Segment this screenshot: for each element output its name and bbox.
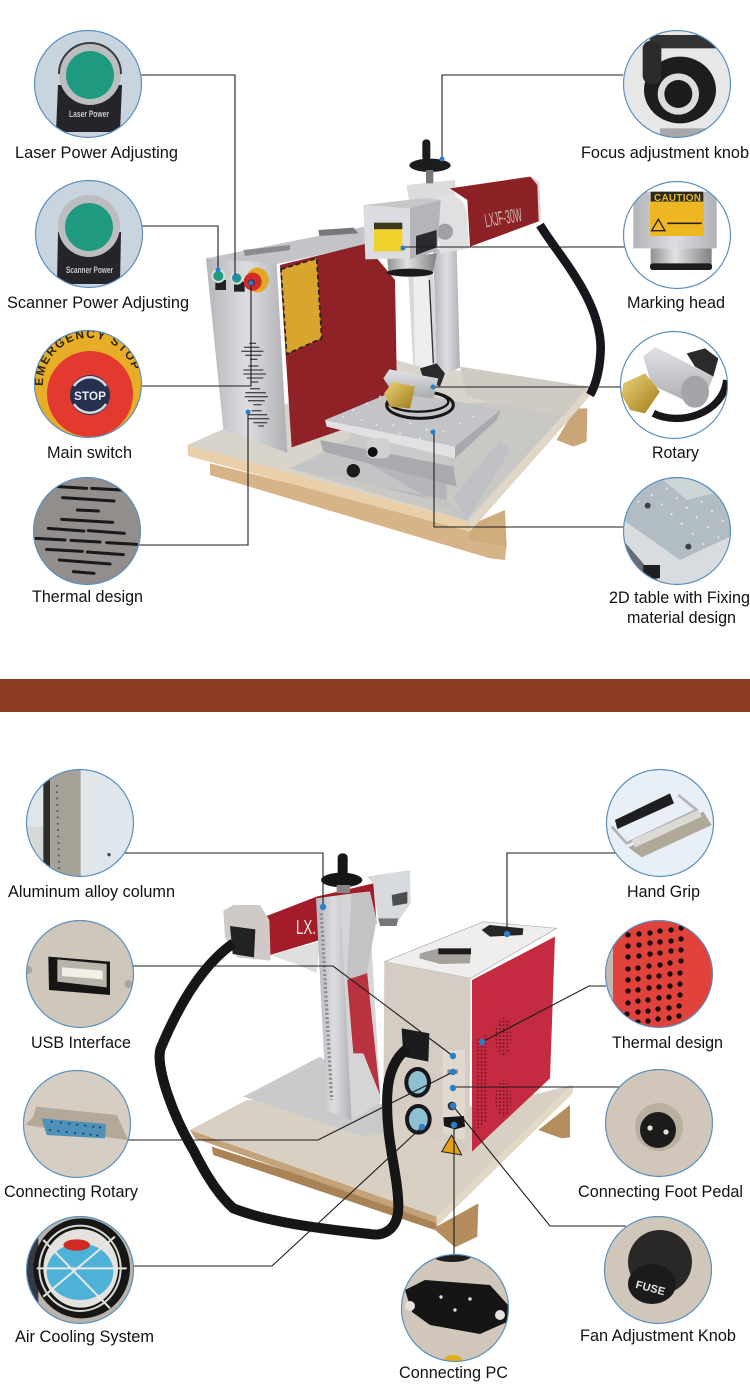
callout: 2D table: material design	[627, 609, 736, 627]
callout: Thermal design right: Thermal design	[612, 1034, 723, 1052]
callout: Laser Power Adjusting: Laser Power Adjusting	[15, 144, 178, 162]
callout: Connecting Foot Pedal: Connecting Foot Pedal	[578, 1183, 743, 1201]
callout: Air Cooling System	[15, 1215, 154, 1346]
callout: Fan Adjustment Knob: Fan Adjustment Knob	[580, 1327, 736, 1345]
icon: green laser power button: Laser Power	[69, 109, 109, 119]
machine photo: rear view	[160, 853, 573, 1247]
callout: Scanner Power Adjusting: Scanner Power Adjusting	[7, 294, 189, 312]
callout: Laser Power Adjusting	[15, 28, 178, 162]
callout: Connecting PC	[399, 1248, 515, 1382]
wooden base	[187, 360, 590, 560]
icon: aluminum column close-up	[25, 768, 135, 880]
callout: Thermal design left: Thermal design	[32, 588, 143, 606]
callout: Air Cooling System: Air Cooling System	[15, 1328, 154, 1346]
machine photo: front view	[187, 139, 601, 560]
callout: 2D table: 2D table with Fixing	[609, 589, 750, 607]
icon: green scanner power button	[36, 181, 142, 287]
vent slots	[241, 343, 269, 426]
callout: Hand Grip	[605, 768, 715, 901]
switches	[215, 280, 226, 290]
callout: Aluminum alloy column: Aluminum alloy column	[8, 883, 175, 901]
callout: Thermal design left	[30, 475, 150, 606]
callout: Fan Adjustment Knob	[580, 1215, 736, 1345]
icon: emergency stop button	[35, 331, 141, 437]
callout: Focus adjustment knob	[581, 28, 749, 162]
callout: Connecting Rotary	[4, 1070, 139, 1201]
callout: Aluminum alloy column	[8, 768, 175, 901]
icon: D-sub connector	[22, 1070, 132, 1182]
rear panel fans	[404, 1067, 431, 1098]
column and arm	[223, 853, 411, 1121]
callout: Main switch: Main switch	[47, 444, 132, 462]
icon: IEC power socket	[402, 1255, 508, 1361]
laser source cabinet	[206, 227, 397, 453]
icon: focus knob	[624, 31, 730, 137]
icon: emergency stop button: STOP	[74, 389, 106, 403]
callout: Marking head: Marking head	[627, 294, 725, 312]
callout: USB Interface: USB Interface	[31, 1034, 131, 1052]
wooden base	[190, 1057, 573, 1247]
callout: Scanner Power Adjusting	[7, 178, 189, 312]
marking head box	[387, 253, 437, 272]
callout: 2D table	[609, 475, 750, 627]
callout leader lines	[124, 75, 626, 1266]
icon: perforated red panel	[604, 920, 715, 1032]
callout: Thermal design right	[604, 920, 723, 1052]
callout: USB Interface	[24, 920, 135, 1052]
callout: Main switch	[34, 330, 142, 462]
icon: round aviation socket	[606, 1070, 712, 1176]
callout: Rotary	[618, 330, 733, 462]
callout: Connecting Rotary: Connecting Rotary	[4, 1183, 139, 1201]
icon: rotary attachment	[622, 346, 727, 422]
callout: Focus adjustment knob: Focus adjustment knob	[581, 144, 749, 162]
section divider band	[0, 679, 750, 712]
icon: USB port	[24, 920, 135, 1032]
red arm	[450, 177, 541, 247]
arm lettering: LX.	[296, 916, 316, 939]
callout: Hand Grip: Hand Grip	[627, 883, 700, 901]
fiber cable	[160, 943, 407, 1234]
focus knob	[422, 139, 430, 161]
column and head: LXJF-30W	[483, 205, 524, 232]
callout: Connecting Foot Pedal	[578, 1068, 743, 1201]
column and head	[363, 139, 601, 395]
icon: vent slots	[34, 478, 140, 584]
laser source cabinet	[160, 922, 557, 1234]
ports	[448, 1102, 456, 1110]
callout: Marking head	[620, 180, 735, 312]
fiber cable	[540, 225, 601, 395]
icon: 2D table plate	[624, 478, 730, 584]
icon: fuse cap: FUSE	[634, 1279, 666, 1298]
icon: marking head with caution label: CAUTION	[654, 193, 701, 204]
warning label	[281, 258, 322, 354]
callout: Rotary: Rotary	[652, 444, 700, 462]
icon: cooling fan grille	[25, 1215, 135, 1327]
callout: Connecting PC: Connecting PC	[399, 1364, 508, 1382]
2D table and rotary	[290, 363, 510, 522]
warning triangle	[442, 1135, 462, 1155]
icon: fuse cap	[605, 1217, 711, 1323]
icon: folding hand grip	[605, 768, 715, 880]
icon: emergency stop button: EMERGENCY STOP	[35, 331, 138, 386]
callout anchor dots	[216, 156, 510, 1130]
connector plate	[402, 1028, 429, 1062]
icon: green scanner power button: Scanner Power	[66, 265, 113, 275]
icon: green laser power button	[35, 31, 141, 137]
